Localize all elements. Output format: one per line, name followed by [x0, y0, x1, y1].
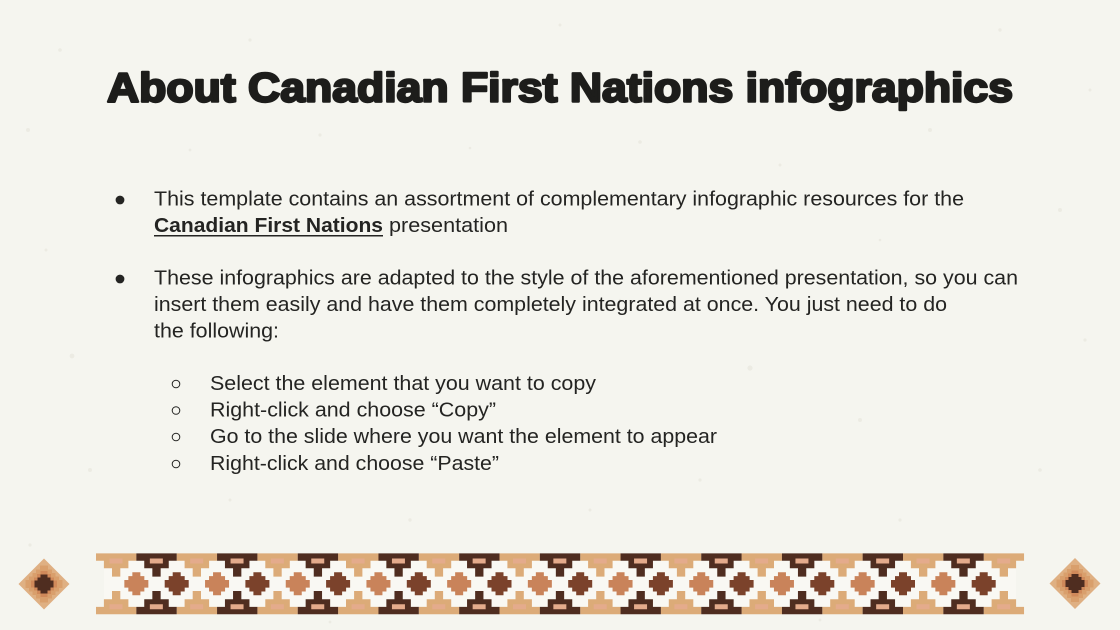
text block: first bullet: [116, 188, 964, 237]
text block: first bullet: Canadian First Nations: [154, 214, 383, 237]
text block: sub-list of steps: Select the element that you want to copy: [210, 372, 597, 395]
decorative patterned border strip: [96, 553, 1024, 614]
text block: first bullet: presentation: [389, 214, 508, 237]
text block: sub-list of steps: Right-click and choose “Paste”: [210, 452, 499, 475]
text block: second bullet: insert them easily and have them completely integrated at once. You just need to do: [154, 293, 947, 316]
icon: left corner diamond: [18, 558, 70, 610]
text block: second bullet: the following:: [154, 320, 279, 342]
text block: second bullet: These infographics are adapted to the style of the aforementioned presentation, so you can: [154, 266, 1018, 290]
icon: right corner diamond: [1050, 558, 1100, 609]
text block: sub-list of steps: Right-click and choose “Copy”: [210, 398, 496, 422]
text block: sub-list of steps: Go to the slide where you want the element to appear: [210, 425, 717, 448]
text block: second bullet: [116, 266, 1018, 342]
text block: first bullet: This template contains an assortment of complementary infographic resources for the: [154, 188, 964, 210]
title: About Canadian First Nations infographics: [107, 64, 1013, 110]
text block: sub-list of steps: [172, 372, 717, 475]
